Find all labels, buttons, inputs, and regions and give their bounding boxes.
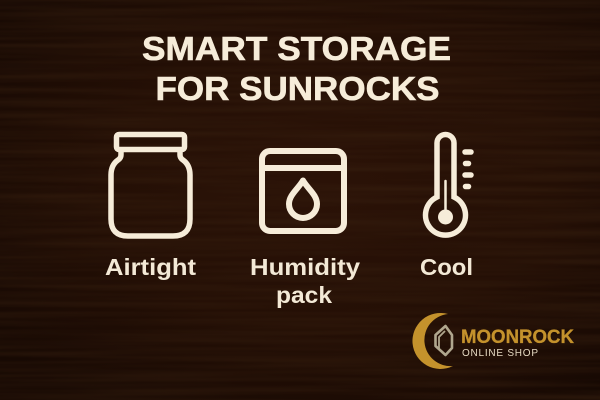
icon: airtight jar [111,134,190,236]
title [142,30,451,107]
logo tagline: ONLINE SHOP [462,348,538,359]
label: Humidity pack: Humidity [250,254,360,280]
logo gem [436,326,452,355]
label: Humidity pack: pack [276,282,332,308]
logo wordmark: MOONROCK [461,326,574,348]
icon: humidity pack [262,151,344,231]
title: SMART STORAGE [142,30,451,67]
title: FOR SUNROCKS [156,70,440,107]
logo: Moonrock Online Shop [412,313,574,369]
icon: thermometer [426,134,471,235]
label: Airtight: Airtight [105,254,196,280]
label: Humidity pack [250,254,360,308]
logo crescent moon [412,313,453,369]
label: Cool: Cool [420,254,473,280]
